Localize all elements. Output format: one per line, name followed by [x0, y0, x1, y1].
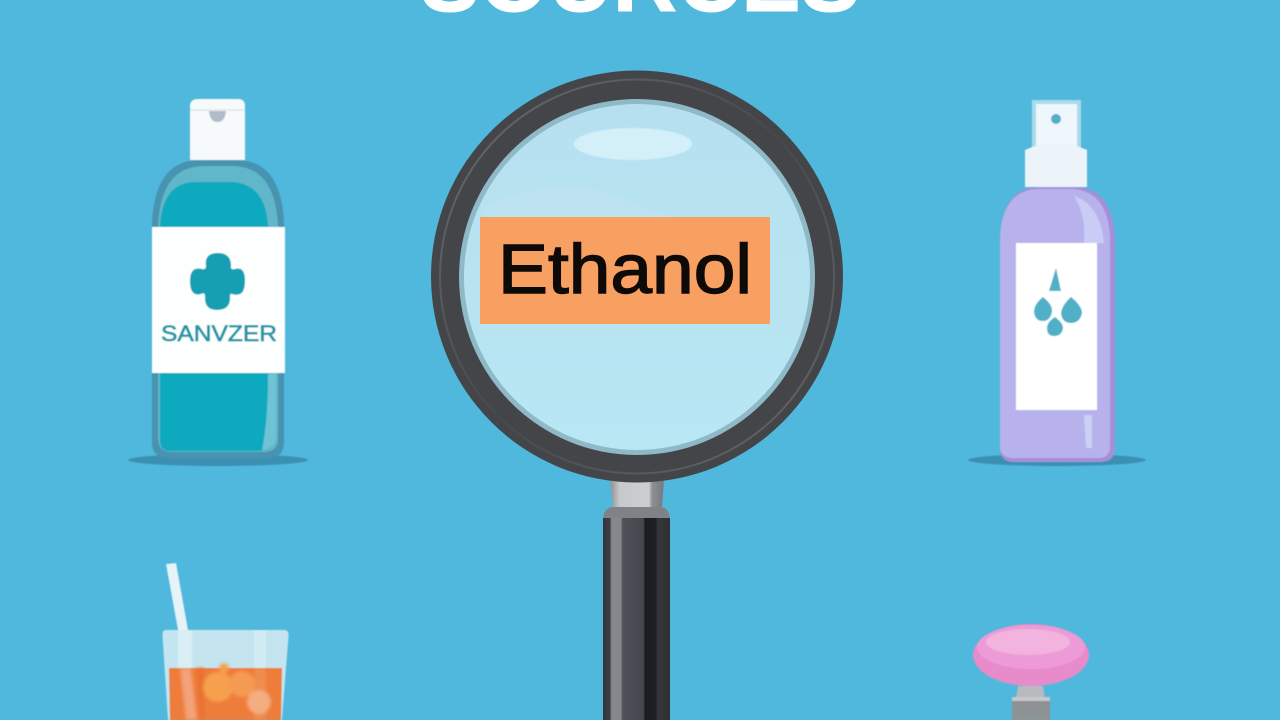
bottle label text: SANVZER — [161, 321, 277, 346]
handle — [603, 478, 670, 720]
lens ring — [431, 70, 843, 482]
icon: drink glass — [162, 563, 289, 720]
bottle label — [152, 227, 285, 373]
spray label — [1016, 243, 1097, 410]
glass — [162, 630, 289, 720]
lens — [464, 104, 810, 450]
liquid — [169, 668, 282, 720]
icon: spray bottle — [968, 100, 1146, 466]
ethanol label — [480, 217, 770, 324]
icon: cross clover — [190, 253, 245, 310]
spray nozzle — [1032, 100, 1081, 150]
icon: droplets — [1034, 268, 1082, 336]
magnifying glass — [431, 70, 843, 720]
straw — [166, 563, 188, 630]
ethanol label: Ethanol — [498, 230, 752, 308]
icon: sanitizer bottle — [128, 99, 308, 466]
icon: pink soap dispenser — [973, 624, 1089, 720]
